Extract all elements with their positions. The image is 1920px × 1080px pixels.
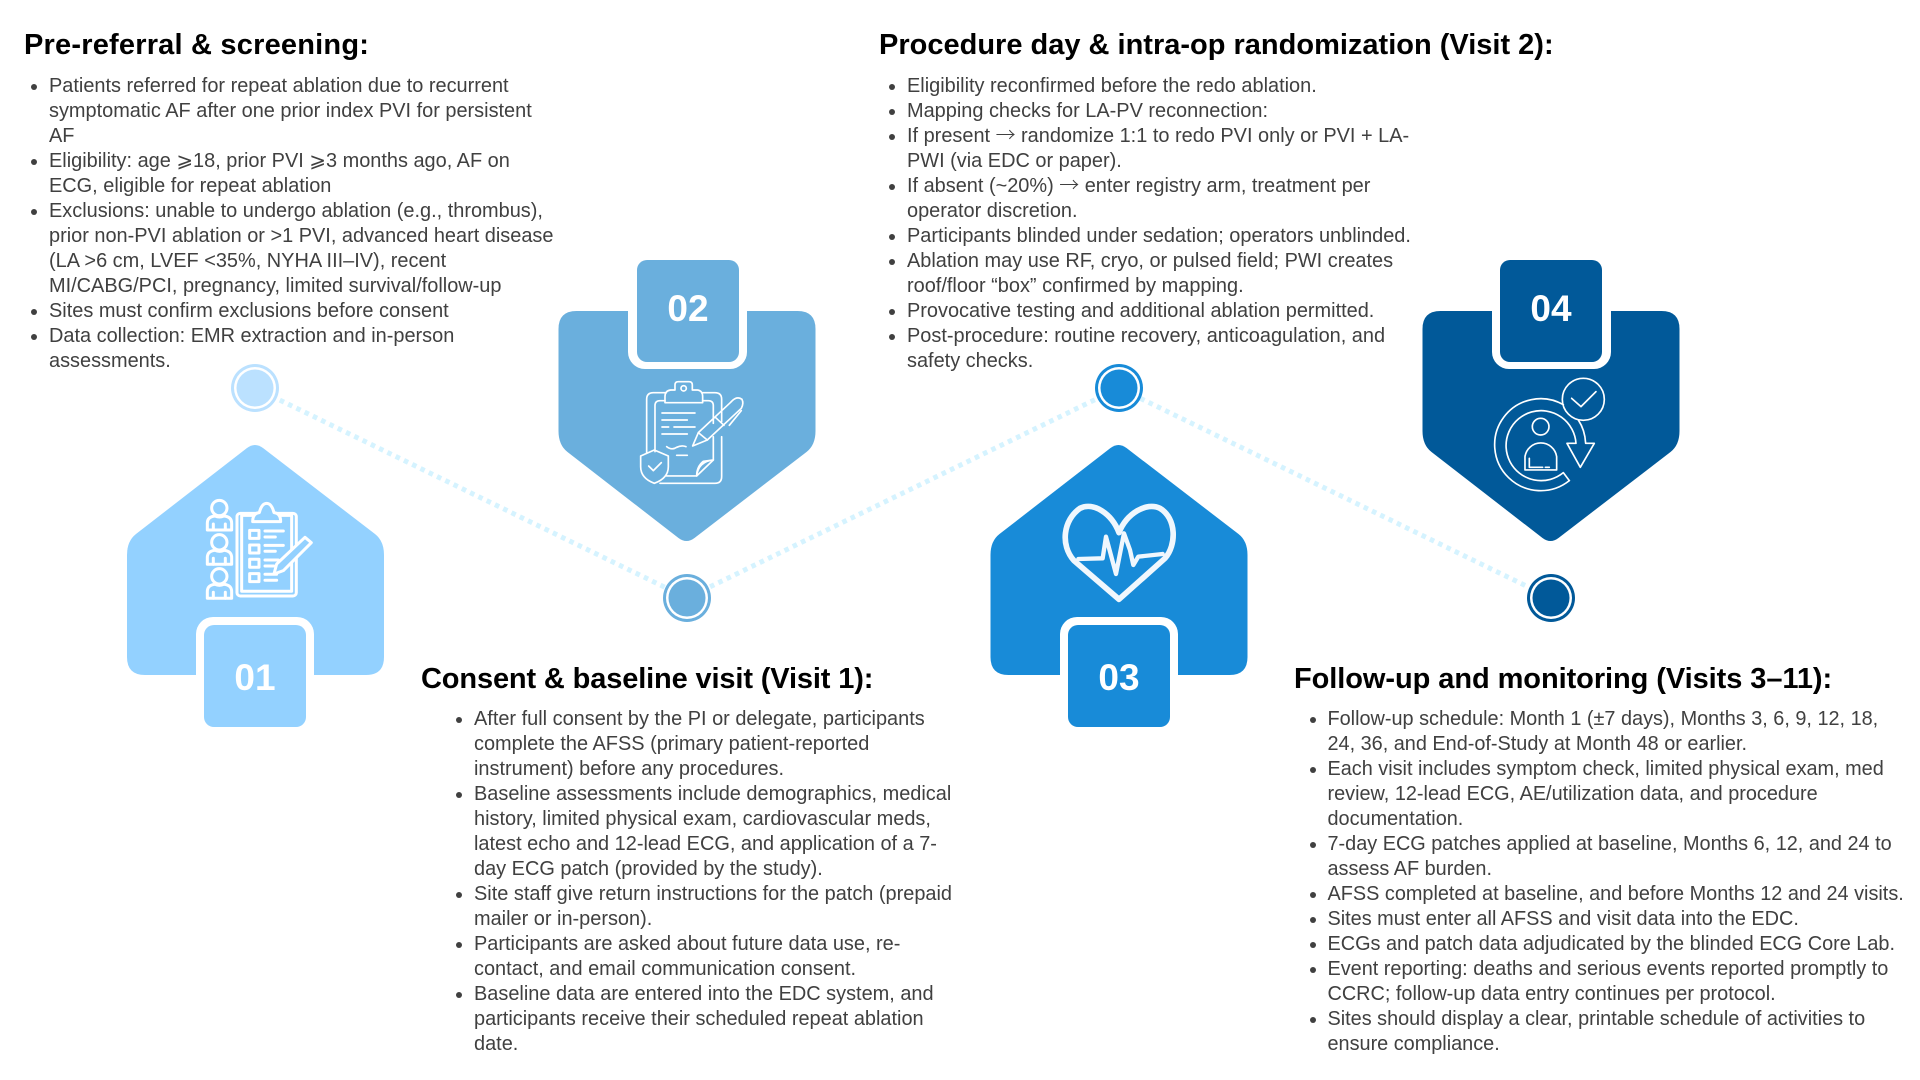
- list: procedure day: Post-procedure: routine recovery, anticoagulation, and: [907, 324, 1385, 346]
- list: follow-up: ECGs and patch data adjudicated by the blinded ECG Core Lab.: [1328, 933, 1895, 955]
- marker 02: [663, 574, 711, 622]
- list: pre-referral: Patients referred for repeat ablation due to recurrent: [49, 74, 509, 96]
- list: procedure day: PWI (via EDC or paper).: [907, 150, 1122, 172]
- list: pre-referral: [31, 74, 553, 372]
- icon: clipboard with pen and shield: [641, 382, 743, 483]
- list: pre-referral: AF: [49, 124, 74, 146]
- number 02: 02: [667, 288, 709, 329]
- list: procedure day: roof/floor “box” confirmed by mapping.: [907, 274, 1244, 296]
- list: procedure day: operator discretion.: [907, 200, 1078, 222]
- list: follow-up: 7-day ECG patches applied at baseline, Months 6, 12, and 24 to: [1328, 833, 1892, 855]
- list: procedure day: safety checks.: [907, 350, 1033, 372]
- heading: follow-up: Follow-up and monitoring (Visits 3–11):: [1294, 662, 1832, 694]
- list: pre-referral: MI/CABG/PCI, pregnancy, limited survival/follow-up: [49, 274, 501, 296]
- list: follow-up: Sites should display a clear, printable schedule of activities to: [1328, 1008, 1865, 1030]
- number 04: 04: [1530, 288, 1572, 329]
- list: follow-up: Sites must enter all AFSS and visit data into the EDC.: [1328, 908, 1799, 930]
- shape 01: house with tab: [127, 445, 384, 730]
- list: consent: instrument) before any procedures.: [474, 758, 784, 780]
- list: consent: [456, 708, 952, 1055]
- heading: pre-referral: Pre-referral & screening:: [24, 28, 369, 60]
- icon: heart with pulse: [1065, 506, 1173, 599]
- list: pre-referral: Sites must confirm exclusions before consent: [49, 300, 449, 322]
- list: follow-up: Event reporting: deaths and serious events reported promptly to: [1328, 958, 1888, 980]
- list: pre-referral: prior non-PVI ablation or >1 PVI, advanced heart disease: [49, 224, 553, 246]
- marker 01: [231, 364, 279, 412]
- list: follow-up: ensure compliance.: [1328, 1033, 1500, 1055]
- list: consent: date.: [474, 1033, 518, 1055]
- list: pre-referral: (LA >6 cm, LVEF <35%, NYHA III–IV), recent: [49, 250, 446, 272]
- icon: people and checklist: [207, 500, 311, 598]
- list: pre-referral: assessments.: [49, 350, 171, 372]
- list: consent: day ECG patch (provided by the study).: [474, 858, 823, 880]
- list: procedure day: Ablation may use RF, cryo, or pulsed field; PWI creates: [907, 250, 1393, 272]
- list: follow-up: AFSS completed at baseline, and before Months 12 and 24 visits.: [1328, 883, 1904, 905]
- shape 02: down arrow with tab: [558, 250, 816, 541]
- list: follow-up: assess AF burden.: [1328, 858, 1492, 880]
- list: consent: After full consent by the PI or delegate, participants: [474, 708, 925, 730]
- dotted connector line: [255, 388, 1551, 598]
- marker 04: [1527, 574, 1575, 622]
- list: follow-up: CCRC; follow-up data entry continues per protocol.: [1328, 983, 1776, 1005]
- number 03: 03: [1098, 657, 1140, 698]
- shape 03: house with tab: [990, 445, 1248, 730]
- heading: procedure day: Procedure day & intra-op randomization (Visit 2):: [879, 28, 1554, 60]
- list: procedure day: [889, 74, 1411, 372]
- list: consent: history, limited physical exam, cardiovascular meds,: [474, 808, 931, 830]
- list: procedure day: Eligibility reconfirmed before the redo ablation.: [907, 74, 1317, 96]
- list: follow-up: Follow-up schedule: Month 1 (±7 days), Months 3, 6, 9, 12, 18,: [1328, 708, 1878, 730]
- list: pre-referral: Exclusions: unable to undergo ablation (e.g., thrombus),: [49, 200, 543, 222]
- list: consent: complete the AFSS (primary patient-reported: [474, 733, 869, 755]
- list: consent: Site staff give return instructions for the patch (prepaid: [474, 883, 952, 905]
- list: follow-up: 24, 36, and End-of-Study at Month 48 or earlier.: [1328, 733, 1747, 755]
- list: consent: mailer or in-person).: [474, 908, 652, 930]
- marker 03: [1095, 364, 1143, 412]
- list: pre-referral: Eligibility: age ⩾18, prior PVI ⩾3 months ago, AF on: [49, 150, 510, 172]
- icon: patient follow-up cycle with check: [1495, 378, 1604, 491]
- list: follow-up: review, 12-lead ECG, AE/utilization data, and procedure: [1328, 783, 1818, 805]
- list: consent: latest echo and 12-lead ECG, and application of a 7-: [474, 833, 937, 855]
- list: consent: Participants are asked about future data use, re-: [474, 933, 900, 955]
- list: follow-up: documentation.: [1328, 808, 1463, 830]
- list: consent: participants receive their scheduled repeat ablation: [474, 1008, 924, 1030]
- list: procedure day: Participants blinded under sedation; operators unblinded.: [907, 224, 1411, 246]
- list: pre-referral: Data collection: EMR extraction and in-person: [49, 324, 454, 346]
- number 01: 01: [234, 657, 276, 698]
- list: consent: Baseline data are entered into the EDC system, and: [474, 983, 934, 1005]
- list: consent: contact, and email communication consent.: [474, 958, 856, 980]
- list: consent: Baseline assessments include demographics, medical: [474, 783, 951, 805]
- list: procedure day: If absent (~20%) → enter registry arm, treatment per: [907, 168, 1370, 198]
- shape 04: down arrow with tab: [1422, 250, 1680, 541]
- list: procedure day: Provocative testing and additional ablation permitted.: [907, 300, 1374, 322]
- heading: consent: Consent & baseline visit (Visit 1):: [421, 662, 873, 694]
- list: procedure day: If present → randomize 1:1 to redo PVI only or PVI + LA-: [907, 118, 1409, 148]
- list: pre-referral: ECG, eligible for repeat ablation: [49, 174, 331, 196]
- list: follow-up: [1310, 708, 1904, 1055]
- list: follow-up: Each visit includes symptom check, limited physical exam, med: [1328, 758, 1884, 780]
- list: procedure day: Mapping checks for LA-PV reconnection:: [907, 100, 1268, 122]
- list: pre-referral: symptomatic AF after one prior index PVI for persistent: [49, 100, 532, 122]
